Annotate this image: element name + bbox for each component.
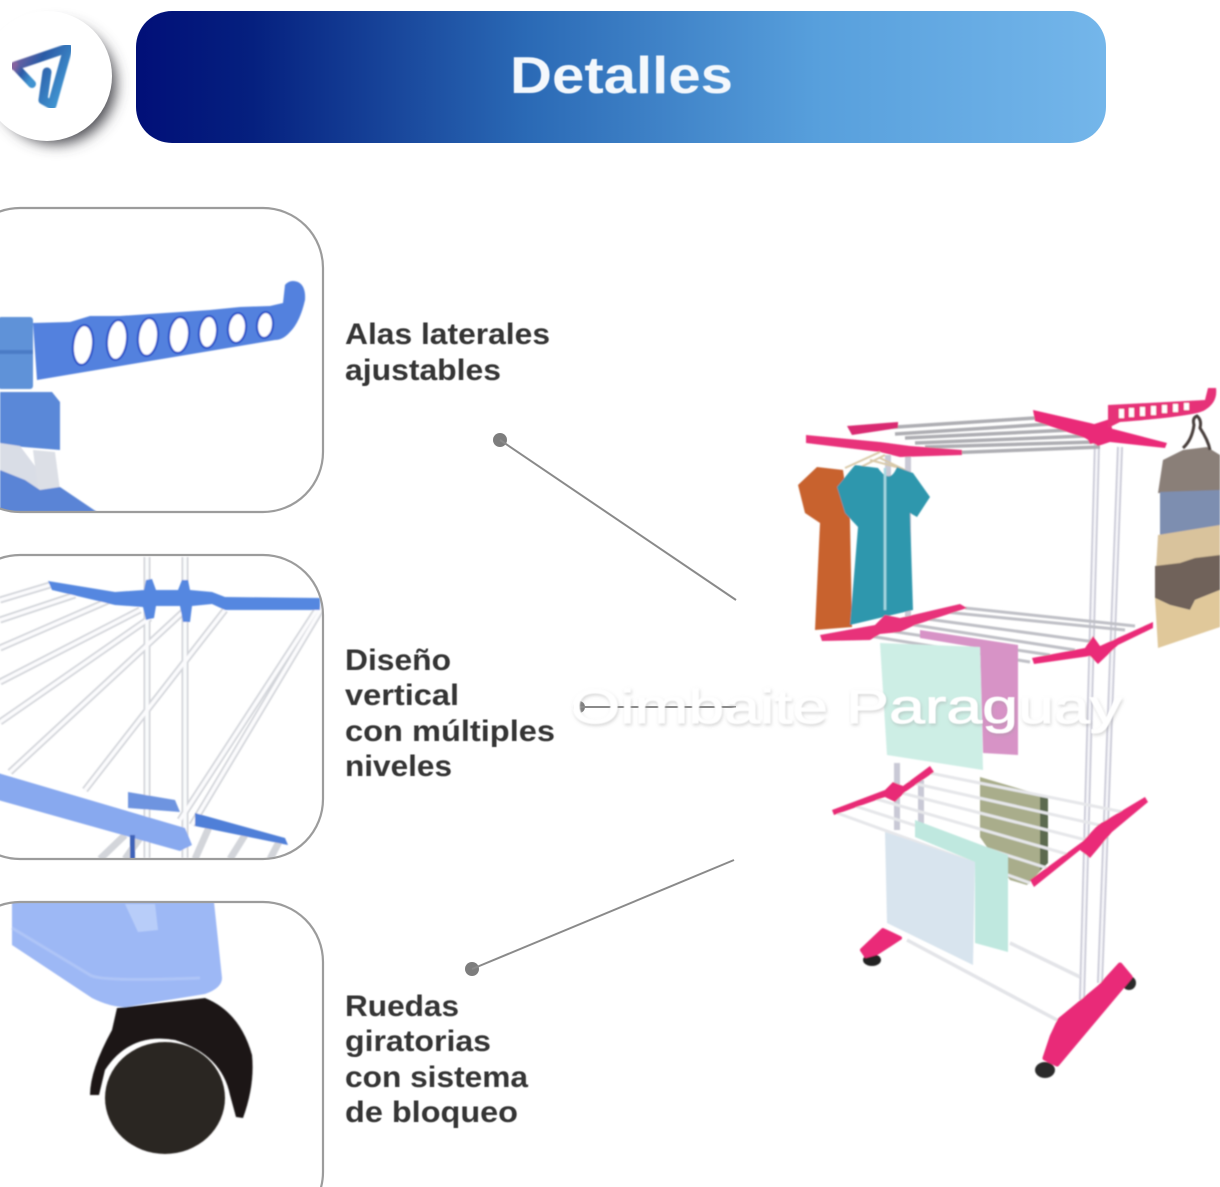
aqua towel [880,643,983,770]
middle shelf right bar [1032,622,1153,664]
sweater [1155,416,1220,648]
light towel lower [885,832,975,965]
label: diseno vertical: niveles [345,750,452,783]
left caster [863,954,881,966]
product: drying rack [798,388,1220,1078]
top shelf right bar [1033,410,1167,448]
lower shelf right bar [1030,797,1148,887]
label: alas laterales: Alas laterales [345,318,550,351]
left foot [862,930,900,956]
orange shirt [798,467,852,630]
label: ruedas giratorias: de bloqueo [345,1096,518,1129]
pink towel top [920,630,1018,755]
lower shelf green towel [980,777,1048,885]
label: ruedas giratorias: Ruedas [345,990,459,1023]
right casters [1035,976,1136,1078]
title banner [136,11,1106,143]
top shelf bar [48,579,320,622]
base rails [907,940,1080,1020]
label: diseno vertical: vertical [345,679,459,712]
lower shelf rails [837,772,1128,883]
panel frame [0,208,323,512]
rack posts [888,443,1120,1000]
panel frame [0,902,323,1187]
watermark: Oimbaite Paraguay [570,681,1122,734]
bottom shelf bar [0,773,192,851]
label: ruedas giratorias: con sistema [345,1061,528,1094]
aqua towel lower [915,820,1008,952]
connector: top [493,433,736,600]
label: diseno vertical: con múltiples [345,715,555,748]
wing arm [33,281,305,380]
top shelf rails [880,418,1100,453]
middle shelf rails [845,608,1135,662]
label: diseno vertical: Diseño [345,644,451,677]
label: alas laterales: ajustables [345,354,501,387]
caster body [12,902,222,1007]
teal shirt [837,465,930,625]
right foot [1045,965,1130,1064]
panel frame [0,555,323,859]
icon: logo arrow [15,48,68,105]
label: ruedas giratorias: giratorias [345,1025,491,1058]
connector: bottom [465,860,734,976]
top shelf left bars [806,435,962,457]
heading: Detalles [510,47,733,105]
hangers [845,452,905,470]
wheel housing [90,998,253,1118]
logo badge [0,11,116,144]
connector: middle [573,701,736,713]
panel: vertical design [0,555,323,859]
lower shelf left bar [832,766,934,815]
side wing with holes [1108,388,1216,428]
wheel [105,1042,225,1154]
panel: wheels [0,902,323,1187]
panel: side wings [0,208,323,512]
middle shelf left bar [820,604,967,641]
